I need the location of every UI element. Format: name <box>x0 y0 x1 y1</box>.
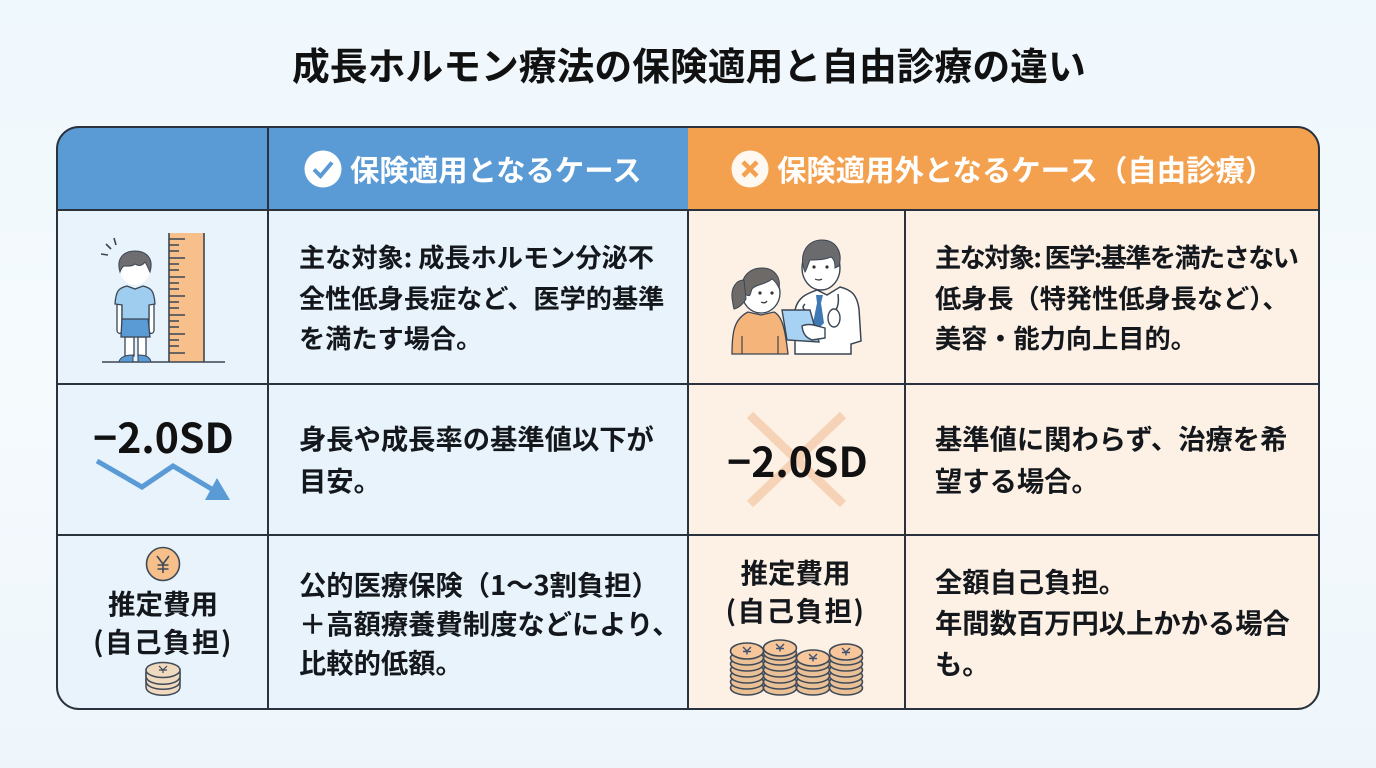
header: not covered by insurance <box>732 148 1274 190</box>
cross mark <box>747 412 846 508</box>
icon: cross mark <box>732 150 768 188</box>
cost label: not covered <box>726 551 865 696</box>
text: cost, covered <box>299 563 680 681</box>
label text: 推定費用 <box>740 551 850 591</box>
icon: boy beside height ruler <box>100 233 225 363</box>
text: main target, covered: を満たす場合。 <box>299 318 482 356</box>
text: main target, not covered: 低身長（特発性低身長など）、 <box>935 278 1289 316</box>
text: threshold, not covered: 望する場合。 <box>935 459 1099 499</box>
title: 成長ホルモン療法の保険適用と自由診療の違い <box>292 36 1086 91</box>
text: main target, covered: 主な対象: 成長ホルモン分泌不 <box>299 237 654 275</box>
text: main target, covered: 全性低身長症など、医学的基準 <box>299 278 664 316</box>
label text: (自己負担) <box>726 589 865 629</box>
comparison table <box>56 126 1320 710</box>
text: threshold, covered <box>299 417 654 499</box>
cost label: covered <box>93 546 233 696</box>
text: threshold, covered: 目安。 <box>299 459 381 499</box>
text: threshold, not covered: 基準値に関わらず、治療を希 <box>935 417 1287 457</box>
icon: coin stack <box>145 662 181 696</box>
text: main target, covered <box>299 237 664 356</box>
arrow: downward trend <box>96 458 230 500</box>
label text: (自己負担) <box>93 620 233 660</box>
text: cost, covered: 公的医療保険（1～3割負担） <box>299 563 659 603</box>
icon: crossed-out minus 2.0SD <box>727 412 868 508</box>
label text: 推定費用 <box>108 582 218 622</box>
text: threshold, covered: 身長や成長率の基準値以下が <box>299 417 654 457</box>
text: cost, not covered: も。 <box>935 642 990 682</box>
icon: minus 2.0SD with falling arrow <box>93 405 234 500</box>
value: -2.0SD crossed: −2.0SD <box>727 429 868 489</box>
text: cost, covered: ＋高額療養費制度などにより、 <box>299 602 680 642</box>
table background and grid <box>56 126 1320 710</box>
header text: covered: 保険適用となるケース <box>350 148 642 190</box>
text: main target, not covered: 美容・能力向上目的。 <box>935 318 1197 356</box>
icon: check mark <box>304 150 342 188</box>
text: cost, not covered: 全額自己負担。 <box>935 560 1126 600</box>
icon: stacks of coins <box>730 639 864 696</box>
text: cost, not covered <box>935 560 1290 682</box>
text: cost, covered: 比較的低額。 <box>299 641 463 681</box>
header: covered by insurance <box>304 148 642 190</box>
icon: girl and doctor <box>731 240 862 355</box>
label text <box>93 582 233 660</box>
label text <box>726 551 865 629</box>
header text: not covered: 保険適用外となるケース（自由診療） <box>777 148 1274 190</box>
text: main target, not covered: 主な対象: 医学:基準を満たさない <box>935 237 1297 275</box>
text: cost, not covered: 年間数百万円以上かかる場合 <box>935 601 1290 641</box>
icon: yen coin <box>146 546 180 582</box>
text: main target, not covered <box>935 237 1298 356</box>
value: -2.0SD: −2.0SD <box>93 405 234 465</box>
text: threshold, not covered <box>935 417 1287 499</box>
